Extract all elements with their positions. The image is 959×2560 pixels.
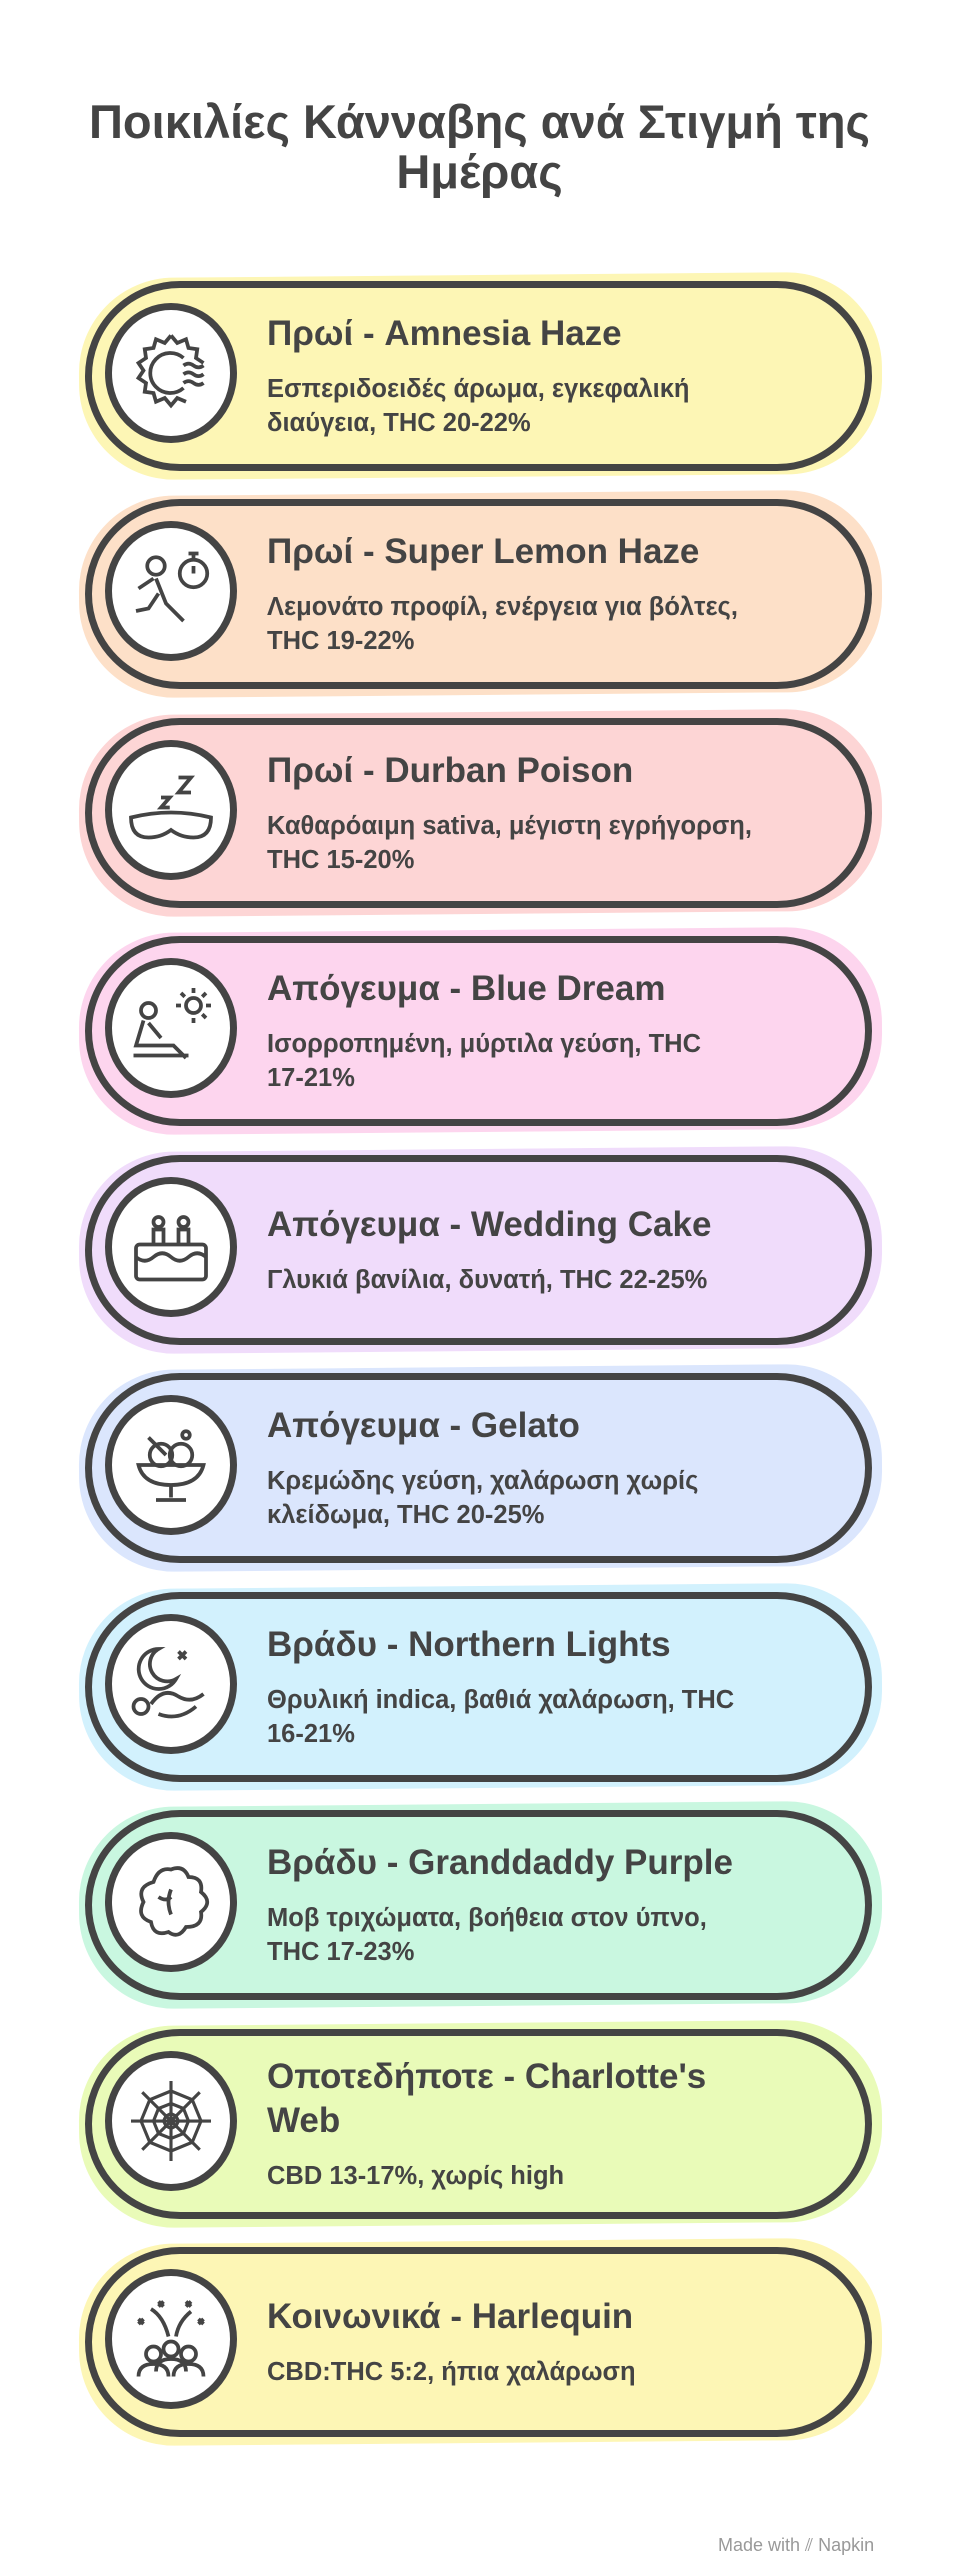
text block: Βράδυ - Granddaddy Purple	[267, 1843, 733, 1882]
text block	[267, 751, 752, 874]
panel: Super Lemon Haze	[79, 490, 882, 698]
icon: spider web	[105, 2051, 237, 2191]
panel: Blue Dream	[79, 927, 882, 1135]
text block: CBD:THC 5:2, ήπια χαλάρωση	[267, 2358, 636, 2386]
text block	[267, 2057, 706, 2190]
icon: sun with waves	[105, 303, 237, 443]
text block: Απόγευμα - Blue Dream	[267, 969, 665, 1008]
icon: moon sleeper	[105, 1614, 237, 1754]
text block	[267, 532, 738, 655]
icon: people fireworks	[105, 2269, 237, 2409]
panel: Charlotte's Web	[79, 2020, 882, 2228]
icon: cotton plant	[105, 1832, 237, 1972]
text block	[267, 2297, 636, 2386]
panel: Granddaddy Purple	[79, 1801, 882, 2009]
text block: Πρωί - Amnesia Haze	[267, 314, 622, 353]
title: Ημέρας	[396, 145, 563, 198]
text block: Πρωί - Durban Poison	[267, 751, 633, 790]
text block: THC 17-23%	[267, 1938, 414, 1966]
text block: Οποτεδήποτε - Charlotte's	[267, 2057, 706, 2096]
panel: Amnesia Haze	[79, 272, 882, 480]
panel: Durban Poison	[79, 709, 882, 917]
text block: Πρωί - Super Lemon Haze	[267, 532, 699, 571]
text block: Γλυκιά βανίλια, δυνατή, THC 22-25%	[267, 1266, 707, 1294]
text block	[267, 314, 690, 437]
text block: CBD 13-17%, χωρίς high	[267, 2162, 564, 2190]
icon: runner with stopwatch	[105, 521, 237, 661]
text block: Λεμονάτο προφίλ, ενέργεια για βόλτες,	[267, 593, 738, 621]
title	[89, 95, 870, 198]
text block	[267, 1625, 734, 1748]
text block	[267, 1843, 733, 1966]
icon: ice cream bowl	[105, 1395, 237, 1535]
text block: Web	[267, 2101, 340, 2140]
text block: THC 19-22%	[267, 627, 414, 655]
icon: cake	[105, 1177, 237, 1317]
panel: Wedding Cake	[79, 1146, 882, 1354]
text block: Θρυλική indica, βαθιά χαλάρωση, THC	[267, 1686, 734, 1714]
text block	[267, 1406, 698, 1529]
text block: Απόγευμα - Wedding Cake	[267, 1205, 711, 1244]
text block: Βράδυ - Northern Lights	[267, 1625, 671, 1664]
panel: Harlequin	[79, 2238, 882, 2446]
title: Ποικιλίες Κάνναβης ανά Στιγμή της	[89, 95, 870, 148]
icon: lounge chair sun	[105, 958, 237, 1098]
text block: Εσπεριδοειδές άρωμα, εγκεφαλική διαύγεια, THC 20-22%	[267, 375, 690, 437]
text block: Μοβ τριχώματα, βοήθεια στον ύπνο,	[267, 1904, 707, 1932]
text block: Καθαρόαιμη sativa, μέγιστη εγρήγορση,	[267, 812, 752, 840]
icon: sleep mask	[105, 740, 237, 880]
panel: Gelato	[79, 1364, 882, 1572]
text block	[267, 969, 701, 1092]
text block: THC 15-20%	[267, 846, 414, 874]
text block: Κρεμώδης γεύση, χαλάρωση χωρίς κλείδωμα, THC 20-25%	[267, 1467, 698, 1529]
text block	[267, 1205, 711, 1294]
text block: 16-21%	[267, 1720, 355, 1748]
panel: Northern Lights	[79, 1583, 882, 1791]
text block: Ισορροπημένη, μύρτιλα γεύση, THC	[267, 1030, 701, 1058]
text block: 17-21%	[267, 1064, 355, 1092]
text block: Απόγευμα - Gelato	[267, 1406, 580, 1445]
text block: Κοινωνικά - Harlequin	[267, 2297, 633, 2336]
footer: made with napkin: Made with ⫽ Napkin	[718, 2535, 874, 2555]
